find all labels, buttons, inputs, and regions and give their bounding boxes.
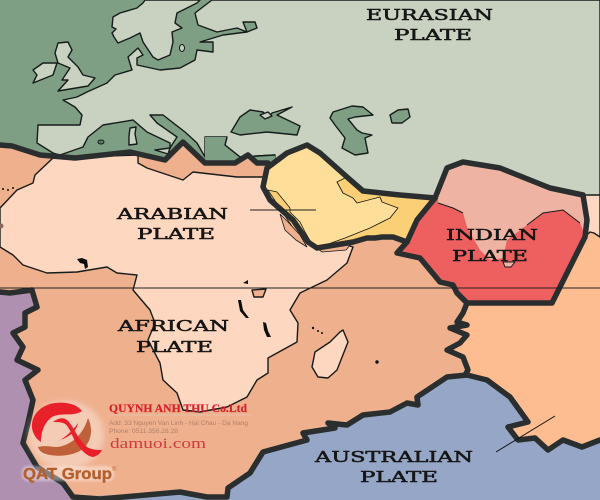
Sri Lanka bbox=[503, 262, 515, 267]
Indian plate bbox=[397, 195, 587, 303]
company logo watermark bbox=[22, 401, 117, 483]
Red Sea strip bbox=[268, 190, 312, 244]
address: Add: 33 Nguyen Van Linh - Hai Chau - Da Nang bbox=[109, 420, 248, 427]
phone: Phone: 0511.358.28.28 bbox=[109, 428, 178, 435]
wordmark glow bbox=[22, 466, 114, 481]
short line across Arabian plate bbox=[250, 209, 316, 211]
Australian plate bbox=[73, 375, 600, 500]
label: African plate bbox=[116, 319, 229, 356]
Madagascar bbox=[312, 330, 348, 378]
QAT Group wordmark: QAT Group bbox=[23, 466, 112, 483]
Arabian salmon fringe bbox=[280, 214, 350, 252]
diagonal line near Australian plate bbox=[496, 416, 555, 452]
label: Eurasian plate bbox=[366, 8, 493, 44]
company details bbox=[108, 403, 251, 452]
Black Sea bbox=[231, 107, 300, 135]
Eurasian landmass bbox=[33, 0, 600, 210]
Arabian plate bbox=[263, 145, 435, 248]
label: Indian plate bbox=[446, 228, 538, 265]
Lake Victoria and small lakes bbox=[0, 187, 379, 364]
Crimea bbox=[260, 112, 272, 119]
label: Arabian plate bbox=[115, 207, 228, 243]
website: damuoi.com bbox=[110, 436, 206, 452]
Scandinavia bbox=[112, 0, 200, 60]
Great Britain bbox=[55, 42, 95, 91]
Purple plate bbox=[0, 290, 80, 500]
icon: brown swoosh bbox=[38, 418, 91, 456]
label: Indian plate: INDIAN bbox=[446, 228, 538, 244]
Atlantic and European seas bbox=[0, 0, 600, 200]
Ireland bbox=[33, 63, 57, 83]
African plate ocean bbox=[0, 142, 470, 500]
African continent bbox=[0, 155, 353, 412]
label: Eurasian plate: EURASIAN bbox=[366, 8, 493, 24]
plate boundaries bbox=[0, 142, 600, 499]
icon: red cross swoosh bbox=[53, 418, 102, 457]
Sardinia and Corsica bbox=[129, 127, 137, 145]
Eastern Mediterranean strip bbox=[200, 137, 275, 168]
icon: red arc bbox=[32, 403, 82, 442]
label: Australian plate bbox=[313, 450, 473, 486]
company name: QUYNH ANH THU Co.Ltd bbox=[109, 403, 248, 415]
Eastern plate ocean bbox=[447, 195, 600, 450]
Himalayan region bbox=[438, 162, 585, 260]
label: Indian plate: PLATE bbox=[452, 249, 528, 265]
Persian Gulf bbox=[320, 177, 435, 250]
logo glow bbox=[28, 401, 104, 469]
Sicily bbox=[155, 148, 170, 154]
Aral Sea bbox=[390, 109, 410, 123]
label: Arabian plate: ARABIAN bbox=[115, 207, 228, 223]
label: Arabian plate: PLATE bbox=[137, 227, 215, 243]
Caspian Sea bbox=[330, 106, 373, 155]
label: African plate: AFRICAN bbox=[116, 319, 229, 335]
label: African plate: PLATE bbox=[136, 340, 213, 356]
Gotland bbox=[180, 44, 184, 52]
Balearic island bbox=[98, 140, 104, 144]
Asian land strip at right edge bbox=[585, 195, 600, 237]
label: Australian plate: PLATE bbox=[360, 470, 438, 486]
Lake Ladoga bbox=[243, 22, 257, 32]
label: Eurasian plate: PLATE bbox=[394, 28, 472, 44]
registered mark: ® bbox=[112, 466, 117, 473]
equator line bbox=[0, 287, 600, 289]
label: Australian plate: AUSTRALIAN bbox=[313, 450, 473, 466]
